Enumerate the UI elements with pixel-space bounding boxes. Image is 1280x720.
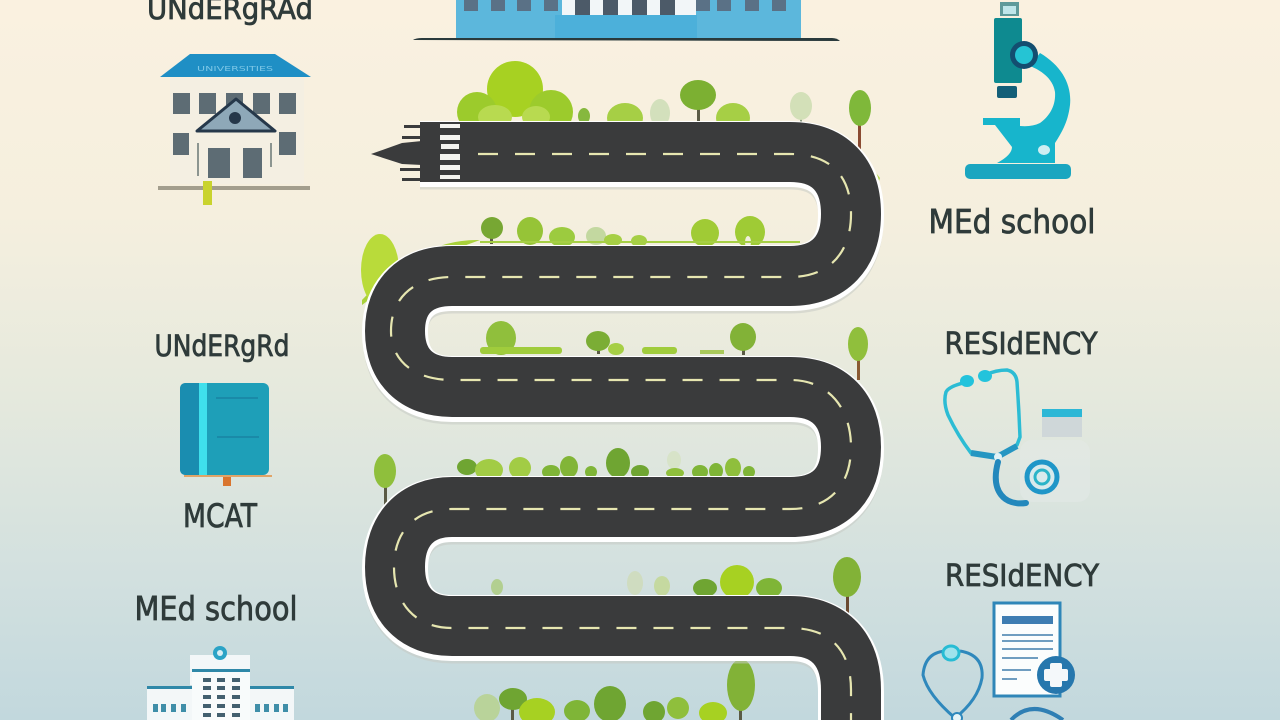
road centre dashes [391, 154, 851, 720]
label: MCAT: MCAT [183, 497, 257, 535]
winding road [391, 152, 851, 720]
label: Residency upper: RESIdENCY [944, 327, 1098, 362]
icon: MCAT book [180, 383, 272, 486]
icon: hospital building top [413, 0, 840, 41]
icon: stethoscope with card [945, 370, 1090, 503]
trees: row 6 [474, 659, 755, 720]
icon: university building: UNIVERSITIES [197, 65, 274, 73]
label: Residency lower: RESIdENCY [945, 559, 1100, 594]
icon: stethoscope with chart [923, 603, 1075, 720]
trees: row 2 [361, 216, 800, 306]
trees: row 3 [480, 321, 868, 380]
icon: university building [158, 54, 311, 205]
trees: row 5 [491, 557, 861, 616]
road start arrow and crossing [371, 124, 460, 181]
label: Med school right: MEd school [928, 202, 1096, 241]
label: Med school left: MEd school [134, 589, 298, 628]
label: Undergrad left: UNdERgRd [154, 329, 290, 363]
icon: microscope [965, 2, 1071, 179]
trees: row 1 [457, 61, 880, 190]
trees: row 4 [374, 448, 755, 507]
icon: hospital building bottom [147, 646, 294, 720]
